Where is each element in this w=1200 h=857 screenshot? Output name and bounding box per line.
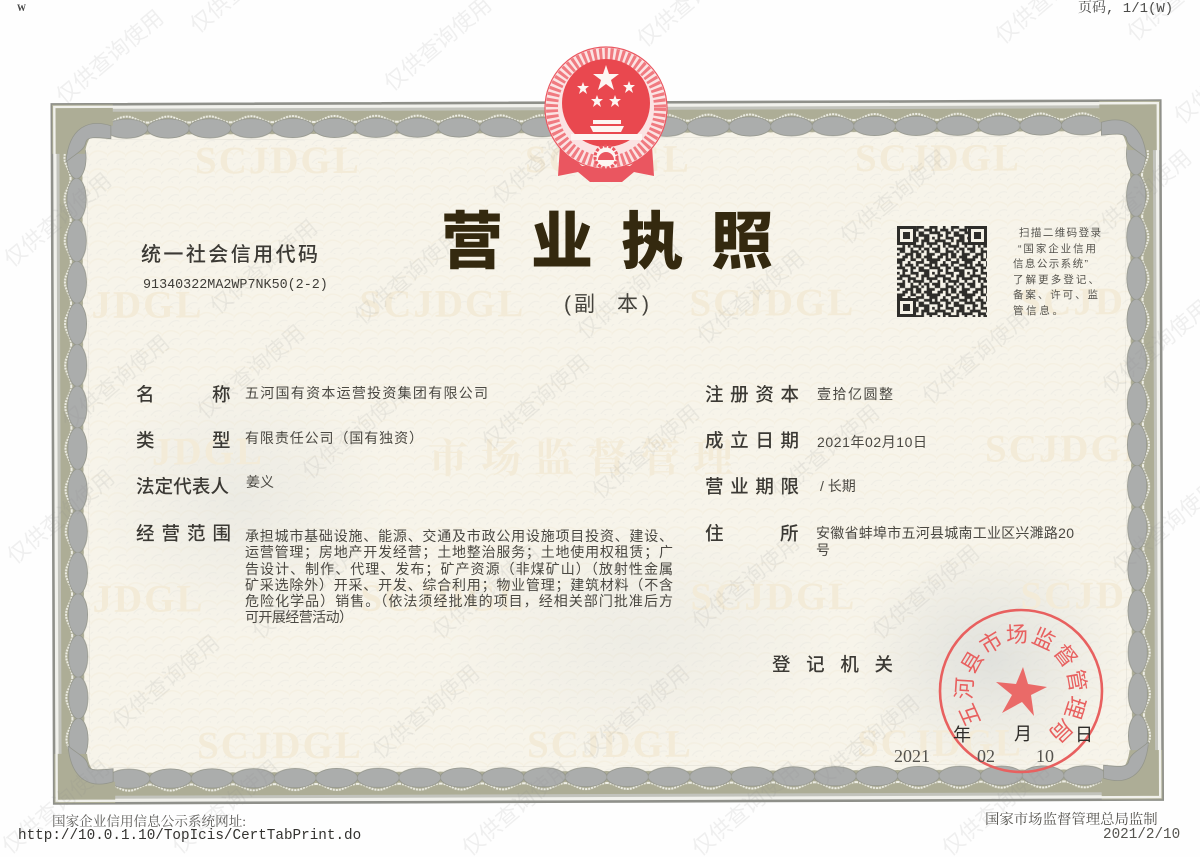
business scope text: 危险化学品）销售。（依法须经批准的项目，经相关部门批准后方 [245, 593, 673, 609]
watermark: 仅供查询使用: 仅供查询使用 [192, 320, 309, 424]
watermark: 仅供查询使用: 仅供查询使用 [572, 240, 689, 344]
field: type: 类 [136, 430, 155, 451]
QR instructions [1013, 226, 1101, 317]
official seal [938, 608, 1104, 774]
paper grey tint [90, 368, 1126, 777]
border: top band [106, 100, 1106, 140]
watermark: 仅供查询使用: 仅供查询使用 [107, 630, 224, 734]
watermark: 仅供查询使用: 仅供查询使用 [0, 168, 116, 272]
field: business term: / 长期 [820, 478, 856, 494]
watermark: 仅供查询使用: 仅供查询使用 [427, 540, 544, 644]
issue date: 2021 [894, 746, 930, 766]
field: business scope: 经营范围 [136, 523, 231, 544]
business scope text: 承担城市基础设施、能源、交通及市政公用设施项目投资、建设、 [245, 528, 673, 544]
security text: SCJDGL: SCJDGL [855, 137, 1021, 180]
border: left band [51, 150, 90, 758]
issue date: 02 [977, 746, 995, 766]
security text: SCJDGL: SCJDGL [857, 722, 1023, 765]
issue date: 年 [953, 725, 971, 745]
watermark: 仅供查询使用: 仅供查询使用 [367, 660, 484, 764]
footer: issuer: 国家市场监督管理总局监制 [985, 811, 1158, 828]
national emblem [545, 47, 667, 182]
field: registered capital: 壹拾亿圆整 [817, 386, 893, 402]
credit code value: 91340322MA2WP7NK50(2-2) [143, 278, 328, 293]
QR instructions: 信息公示系统” [1013, 257, 1088, 270]
security text: SCJDGL: SCJDGL [525, 138, 691, 181]
security text: SCJDGL: SCJDGL [985, 427, 1151, 471]
security text: 市场监督管理: 市场监督管理 [428, 436, 746, 482]
field: established date: 2021年02月10日 [817, 434, 927, 450]
emblem: ribbon [558, 146, 654, 182]
QR instructions: “国家企业信用 [1018, 242, 1096, 255]
watermark: 仅供查询使用: 仅供查询使用 [51, 5, 168, 109]
issue date: 10 [1036, 746, 1054, 766]
business scope text: 告设计、制作、代理、发布；矿产资源（非煤矿山）（放射性金属 [245, 561, 673, 578]
security text: SCJDGL: SCJDGL [195, 139, 361, 182]
watermark: 仅供查询使用: 仅供查询使用 [297, 380, 414, 484]
watermark: 仅供查询使用: 仅供查询使用 [687, 530, 804, 634]
watermark: 仅供查询使用: 仅供查询使用 [247, 540, 364, 644]
watermark: 仅供查询使用: 仅供查询使用 [1079, 145, 1196, 249]
watermark: 仅供查询使用: 仅供查询使用 [57, 330, 174, 434]
watermark: 仅供查询使用: 仅供查询使用 [577, 660, 694, 764]
field: registered capital [705, 384, 893, 405]
field: legal representative: 法定代表人 [136, 476, 229, 497]
field: type [136, 430, 423, 451]
field: address: 住 [705, 523, 724, 544]
certificate panel [51, 100, 1163, 804]
border: corners [51, 100, 1163, 804]
business scope text: 矿采选除外）开采、开发、综合利用；物业管理；建筑材料（不含 [245, 577, 673, 594]
footer: URL: http://10.0.1.10/TopIcis/CertTabPrint.do [18, 828, 361, 844]
security text: SCJDGL: SCJDGL [527, 723, 693, 766]
subtitle: (副本) [564, 293, 649, 316]
field: established date: 成立日期 [705, 430, 799, 451]
header mark: W [17, 3, 26, 13]
field: type: 有限责任公司（国有独资） [245, 430, 423, 446]
watermark: 仅供查询使用: 仅供查询使用 [692, 245, 809, 349]
border: bottom band [108, 764, 1108, 804]
field: name [136, 384, 488, 405]
business scope text: 可开展经营活动） [245, 609, 353, 625]
credit code label: 统一社会信用代码 [141, 243, 318, 266]
field: business term: 营业期限 [705, 476, 799, 497]
emblem: gear [595, 146, 617, 168]
emblem: red disc [562, 59, 650, 147]
field: business term [705, 476, 856, 497]
security text: SCJDGL: SCJDGL [197, 724, 363, 767]
security text: SCJDGL: SCJDGL [360, 576, 526, 620]
watermark: 仅供查询使用: 仅供查询使用 [807, 690, 924, 794]
certificate paper [51, 100, 1163, 804]
field: address: 所 [780, 523, 799, 544]
field: name: 名 [136, 384, 155, 405]
field: business scope [136, 523, 673, 625]
security text: SCJDGL: SCJD [1020, 574, 1126, 618]
QR instructions: 了解更多登记、 [1013, 273, 1099, 286]
watermark: 仅供查询使用: 仅供查询使用 [167, 755, 284, 857]
security text: SCJDGL [91, 136, 1152, 768]
QR instructions: 扫描二维码登录 [1019, 226, 1101, 239]
field: legal representative: 姜义 [246, 474, 274, 490]
emblem: wreath [545, 47, 667, 169]
title: 营业执照 [441, 208, 773, 277]
seal text: 五河县市场监督管理局 [954, 624, 1088, 744]
security text: SCJDGL: SCJD [1019, 280, 1125, 324]
field: legal representative [136, 474, 274, 497]
QR instructions: 管信息。 [1013, 304, 1063, 317]
watermark: 仅供查询使用: 仅供查询使用 [349, 225, 466, 329]
footer: system site label: 国家企业信用信息公示系统网址: [52, 813, 246, 829]
emblem: Tiananmen [571, 120, 642, 140]
QR finder patterns [898, 228, 986, 316]
field: address: 安徽省蚌埠市五河县城南工业区兴濉路20 [816, 525, 1074, 541]
field: established date [705, 430, 927, 451]
issue date [894, 724, 1093, 766]
QR instructions: 备案、许可、监 [1013, 288, 1098, 301]
watermark: 仅供查询使用: 仅供查询使用 [835, 145, 952, 249]
watermark: 仅供查询使用: 仅供查询使用 [487, 105, 604, 209]
watermark: 仅供查询使用: 仅供查询使用 [205, 215, 322, 319]
QR code [897, 226, 987, 317]
field: name: 五河国有资本运营投资集团有限公司 [245, 385, 488, 401]
footer: date: 2021/2/10 [1103, 827, 1180, 843]
issue date: 日 [1075, 725, 1093, 745]
watermark: 仅供查询使用: 仅供查询使用 [867, 540, 984, 644]
security text: SCJDGL: SCJDGL [689, 281, 855, 325]
field: registered capital: 注册资本 [705, 384, 799, 405]
watermark: 仅供查询使用: 仅供查询使用 [917, 305, 1034, 409]
security text: SCJDGL: SCJDGL [359, 282, 525, 326]
watermark: 仅供查询使用: 仅供查询使用 [477, 350, 594, 454]
field: address: 号 [816, 542, 830, 558]
registration authority: 登记机关 [772, 654, 893, 675]
issue date: 月 [1014, 724, 1032, 744]
watermark: 仅供查询使用: 仅供查询使用 [587, 400, 704, 504]
border: right band [1125, 146, 1163, 754]
security text: SCJDGL: JDGL [91, 283, 204, 327]
field: name: 称 [212, 384, 231, 405]
business scope text: 运营管理；房地产开发经营；土地整治服务；土地使用权租赁；广 [245, 544, 673, 561]
seal star [996, 667, 1047, 716]
security text: SCJDGL: JDGL [152, 430, 264, 474]
security text: SCJDGL: SCJDGL [690, 575, 856, 619]
field: address [705, 523, 1074, 558]
watermark: 仅供查询使用: 仅供查询使用 [2, 465, 119, 569]
page number: 页码, 1/1(W) [1078, 0, 1173, 17]
emblem: stars [577, 65, 635, 107]
watermark: 仅供查询使用: 仅供查询使用 [767, 400, 884, 504]
business scope text [245, 528, 673, 625]
field: type: 型 [212, 430, 231, 451]
security text: SCJDGL: JDGL [92, 577, 205, 621]
